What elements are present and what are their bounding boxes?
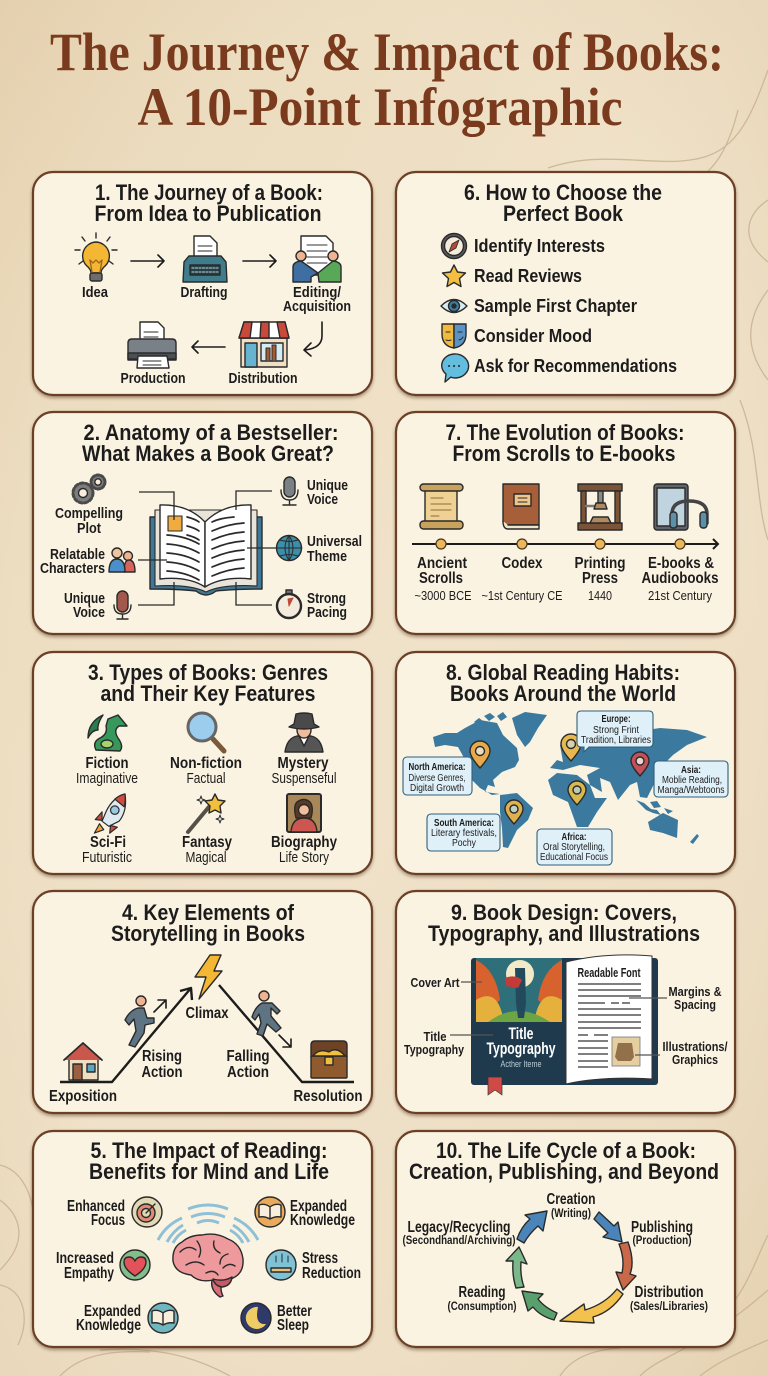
panel 5: impact of reading bbox=[33, 1131, 372, 1347]
panel 4 heading: 4. Key Elements of bbox=[122, 900, 295, 925]
benefit: better sleep bbox=[241, 1303, 312, 1334]
arrow: drafting to editing bbox=[243, 255, 276, 267]
label: title typography: Typography bbox=[404, 1042, 465, 1057]
panel 10: life cycle bbox=[396, 1131, 735, 1347]
label: falling action: Action bbox=[227, 1064, 269, 1081]
panel 7 heading bbox=[446, 420, 684, 466]
benefit: enhanced focus bbox=[67, 1197, 162, 1229]
panel 9 heading: Typography, and Illustrations bbox=[428, 921, 700, 946]
icon: treasure chest bbox=[311, 1041, 347, 1078]
label: printing press bbox=[574, 555, 626, 603]
icon: descending figure bbox=[252, 991, 281, 1036]
label: ancient scrolls: Ancient bbox=[417, 555, 467, 572]
benefit: stress reduction: Stress bbox=[302, 1250, 338, 1267]
callout: north america: North America: bbox=[408, 762, 466, 773]
icon: codex bbox=[503, 484, 539, 529]
label: mystery bbox=[272, 755, 336, 787]
panel 7 heading: From Scrolls to E-books bbox=[452, 441, 676, 466]
label: climax: Climax bbox=[186, 1005, 229, 1022]
panel 8 heading bbox=[446, 660, 680, 706]
label: printing press: Press bbox=[582, 570, 618, 587]
panel 2 heading: 2. Anatomy of a Bestseller: bbox=[84, 420, 338, 445]
callout: europe bbox=[577, 711, 653, 752]
panel 10 heading: 10. The Life Cycle of a Book: bbox=[436, 1138, 696, 1163]
callout: africa: Educational Focus bbox=[540, 852, 608, 863]
labels: unique voice right bbox=[307, 478, 348, 508]
label: legacy and recycling: (Secondhand/Archiving) bbox=[402, 1233, 516, 1247]
map pin: asia bbox=[631, 752, 649, 776]
callout: europe: Europe: bbox=[602, 714, 630, 725]
page text lines bbox=[578, 984, 641, 1067]
icon: theatre masks bbox=[442, 324, 466, 348]
labels: production distribution bbox=[120, 371, 298, 387]
label: resolution: Resolution bbox=[294, 1088, 362, 1105]
label: exposition: Exposition bbox=[49, 1088, 117, 1105]
label: codex: ~1st Century CE bbox=[482, 588, 563, 603]
labels: production distribution: Distribution bbox=[228, 371, 298, 387]
title bbox=[50, 22, 724, 137]
benefit: expanded knowledge bottom bbox=[76, 1303, 178, 1334]
timeline arrow bbox=[412, 539, 718, 549]
callout: south america: Literary festivals, bbox=[431, 828, 497, 839]
label: mystery: Mystery bbox=[278, 755, 329, 772]
label: sci-fi: Sci-Fi bbox=[90, 834, 126, 851]
label: publishing: Publishing bbox=[631, 1219, 693, 1236]
labels: compelling plot bbox=[55, 506, 123, 537]
label: biography bbox=[271, 834, 337, 866]
callout: south america bbox=[427, 814, 500, 851]
icon: biography portrait bbox=[287, 794, 321, 832]
labels: strong pacing: Strong bbox=[307, 591, 346, 607]
label: printing press: Printing bbox=[574, 555, 626, 572]
cover artwork bbox=[476, 958, 562, 1022]
callout: africa: Oral Storytelling, bbox=[543, 842, 605, 853]
benefit: increased empathy: Increased bbox=[56, 1250, 114, 1267]
map pin: africa bbox=[568, 781, 586, 805]
label: falling action bbox=[226, 1048, 270, 1081]
cover title bbox=[486, 1024, 556, 1069]
callout lines bbox=[450, 982, 667, 1055]
benefit: enhanced focus: Focus bbox=[91, 1212, 125, 1229]
labels: idea drafting editing: Idea bbox=[82, 285, 109, 301]
labels: compelling plot: Plot bbox=[77, 521, 101, 537]
panel 9: book design bbox=[396, 891, 735, 1113]
label: creation bbox=[546, 1191, 596, 1220]
label: codex: Codex bbox=[502, 555, 543, 572]
checklist items: Sample First Chapter bbox=[474, 295, 637, 316]
panel 5 heading bbox=[89, 1138, 329, 1184]
icon: typewriter bbox=[183, 236, 227, 282]
label: rising action bbox=[142, 1048, 182, 1081]
labels: strong pacing bbox=[307, 591, 347, 621]
label: codex bbox=[482, 555, 563, 603]
panel 1 heading: 1. The Journey of a Book: bbox=[95, 180, 323, 205]
icon: house bbox=[64, 1043, 102, 1080]
callout: south america: South America: bbox=[434, 818, 494, 829]
callout: europe: Tradition, Libraries bbox=[581, 735, 651, 746]
label: creation: Creation bbox=[546, 1191, 596, 1208]
arrow: idea to drafting bbox=[131, 255, 164, 267]
label: non-fiction: Factual bbox=[186, 771, 226, 787]
panel 6 heading: 6. How to Choose the bbox=[464, 180, 662, 205]
panel 10 heading: Creation, Publishing, and Beyond bbox=[409, 1159, 719, 1184]
panel 8 heading: Books Around the World bbox=[450, 681, 676, 706]
benefit: expanded knowledge bottom: Knowledge bbox=[76, 1317, 141, 1334]
panel 5 heading: 5. The Impact of Reading: bbox=[90, 1138, 328, 1163]
panel 2 heading: What Makes a Book Great? bbox=[82, 441, 334, 466]
labels: unique voice right: Unique bbox=[307, 478, 348, 494]
labels: idea drafting editing bbox=[82, 285, 351, 315]
callout: asia: Manga/Webtoons bbox=[658, 785, 724, 796]
icon: printer bbox=[128, 322, 176, 368]
label: mystery: Suspenseful bbox=[272, 771, 336, 787]
benefit: enhanced focus: Enhanced bbox=[67, 1198, 125, 1215]
cycle arrow: publishing to distribution bbox=[616, 1242, 636, 1290]
label: title typography bbox=[404, 1029, 465, 1057]
arrow: downward bbox=[279, 1035, 291, 1047]
labels: relatable characters: Relatable bbox=[50, 547, 105, 563]
title: A 10-Point Infographic bbox=[138, 77, 622, 137]
checklist items: Identify Interests bbox=[474, 235, 605, 256]
label: ancient scrolls: ~3000 BCE bbox=[414, 588, 472, 603]
label: reading bbox=[448, 1284, 517, 1313]
panel 7 heading: 7. The Evolution of Books: bbox=[446, 420, 684, 445]
label: fantasy: Magical bbox=[186, 850, 226, 866]
benefit: increased empathy: Empathy bbox=[64, 1265, 114, 1282]
icon: printing press bbox=[578, 484, 622, 530]
panel 8: global reading habits bbox=[396, 652, 735, 874]
label: illustrations and graphics: Illustrations/ bbox=[662, 1039, 728, 1054]
icon: people bbox=[109, 548, 135, 572]
panel 4: storytelling bbox=[33, 891, 372, 1113]
labels: idea drafting editing: Drafting bbox=[180, 285, 228, 301]
panel 1: journey of a book bbox=[33, 172, 372, 395]
icon: stopwatch bbox=[277, 590, 301, 618]
panel 3 heading: and Their Key Features bbox=[100, 681, 316, 706]
label: margins and spacing: Margins & bbox=[668, 984, 722, 999]
callout: africa: Africa: bbox=[562, 832, 586, 843]
label: e-books and audiobooks: Audiobooks bbox=[642, 570, 718, 587]
icon: compass bbox=[442, 234, 466, 258]
labels: unique voice left: Voice bbox=[73, 605, 105, 621]
icon: magnifying glass bbox=[188, 713, 224, 751]
label: distribution: (Sales/Libraries) bbox=[630, 1299, 708, 1313]
label: legacy and recycling: Legacy/Recycling bbox=[408, 1219, 510, 1236]
label: rising action: Rising bbox=[142, 1048, 182, 1065]
arrow: upward bbox=[154, 1000, 166, 1012]
icon: open book bbox=[150, 505, 262, 595]
panel 3: genres bbox=[33, 652, 372, 874]
map pin: north america bbox=[470, 741, 490, 768]
page illustration bbox=[612, 1037, 640, 1066]
label: non-fiction: Non-fiction bbox=[170, 755, 242, 772]
icon: lightning bolt bbox=[195, 955, 222, 999]
callout: asia: Asia: bbox=[681, 765, 701, 776]
label: falling action: Falling bbox=[226, 1048, 270, 1065]
checklist items bbox=[474, 235, 677, 376]
icon: speech bubble bbox=[442, 354, 469, 382]
checklist items: Consider Mood bbox=[474, 325, 592, 346]
callout: europe: Strong Frint bbox=[593, 725, 639, 736]
icon: brain bbox=[173, 1234, 243, 1297]
labels: relatable characters: Characters bbox=[40, 561, 105, 577]
label: e-books and audiobooks: 21st Century bbox=[648, 588, 712, 603]
benefit: expanded knowledge top: Knowledge bbox=[290, 1212, 355, 1229]
panel 8 heading: 8. Global Reading Habits: bbox=[446, 660, 680, 685]
icon: scroll bbox=[420, 484, 463, 529]
benefit: stress reduction bbox=[266, 1250, 361, 1282]
label: legacy and recycling bbox=[402, 1219, 516, 1247]
labels: idea drafting editing: Acquisition bbox=[283, 299, 351, 315]
map pin: europe bbox=[561, 734, 581, 761]
panel 10 heading bbox=[409, 1138, 719, 1184]
label: publishing bbox=[631, 1219, 693, 1247]
icon: detective bbox=[285, 713, 323, 752]
label: fantasy bbox=[182, 834, 232, 866]
cycle arrow: distribution to reading bbox=[560, 1289, 623, 1323]
callout: north america bbox=[403, 757, 472, 795]
labels: strong pacing: Pacing bbox=[307, 605, 347, 621]
labels: universal theme: Theme bbox=[307, 549, 347, 565]
callout: africa bbox=[537, 829, 612, 865]
panel 9 heading: 9. Book Design: Covers, bbox=[451, 900, 677, 925]
label: margins and spacing bbox=[668, 984, 722, 1012]
labels: unique voice right: Voice bbox=[307, 492, 338, 508]
panel 3 heading: 3. Types of Books: Genres bbox=[88, 660, 328, 685]
icon: tablet and headphones bbox=[654, 484, 707, 530]
panel 5 heading: Benefits for Mind and Life bbox=[89, 1159, 329, 1184]
callout: north america: Diverse Genres, bbox=[408, 773, 466, 784]
icon: globe bbox=[276, 536, 302, 560]
bookmark bbox=[488, 1077, 502, 1095]
label: illustrations and graphics: Graphics bbox=[672, 1052, 718, 1067]
leader lines bbox=[138, 491, 276, 605]
label: distribution: Distribution bbox=[634, 1284, 704, 1301]
panel 1 heading bbox=[94, 180, 323, 226]
world map bbox=[433, 712, 707, 848]
timeline markers bbox=[436, 539, 685, 549]
label: creation: (Writing) bbox=[551, 1206, 591, 1220]
benefit: better sleep: Better bbox=[277, 1303, 312, 1320]
benefit: increased empathy bbox=[56, 1250, 150, 1282]
checklist items: Read Reviews bbox=[474, 265, 582, 286]
panel 7: evolution of books bbox=[396, 412, 735, 634]
icon: light bulb bbox=[75, 233, 117, 281]
label: distribution bbox=[630, 1284, 708, 1313]
benefit: better sleep: Sleep bbox=[277, 1317, 309, 1334]
icon: rocket bbox=[94, 794, 126, 833]
label: ancient scrolls bbox=[414, 555, 472, 603]
story arc bbox=[60, 985, 354, 1082]
panel 9 heading bbox=[428, 900, 700, 946]
arrow: editing to distribution bbox=[304, 322, 322, 356]
label: biography: Biography bbox=[271, 834, 337, 851]
label: sci-fi: Futuristic bbox=[82, 850, 132, 866]
labels: unique voice left: Unique bbox=[64, 591, 105, 607]
benefit: stress reduction: Reduction bbox=[302, 1265, 361, 1282]
label: e-books and audiobooks bbox=[642, 555, 718, 603]
label: reading: Reading bbox=[458, 1284, 506, 1301]
checklist items: Ask for Recommendations bbox=[474, 355, 677, 376]
label: fiction: Imaginative bbox=[76, 771, 138, 787]
arrow: distribution to production bbox=[192, 341, 225, 353]
cycle arrow: creation to publishing bbox=[594, 1212, 622, 1242]
label: illustrations and graphics bbox=[662, 1039, 728, 1067]
labels: compelling plot: Compelling bbox=[55, 506, 123, 522]
label: fiction bbox=[76, 755, 138, 787]
labels: unique voice left bbox=[64, 591, 105, 621]
panel 6 heading: Perfect Book bbox=[503, 201, 624, 226]
icon: dragon bbox=[88, 715, 127, 751]
icon: magic wand bbox=[188, 794, 225, 832]
label: margins and spacing: Spacing bbox=[674, 997, 716, 1012]
label: readable font: Readable Font bbox=[578, 965, 641, 980]
panel 4 heading bbox=[111, 900, 305, 946]
label: printing press: 1440 bbox=[588, 588, 612, 603]
panel 4 heading: Storytelling in Books bbox=[111, 921, 305, 946]
icon: grey microphone bbox=[281, 477, 298, 505]
label: biography: Life Story bbox=[279, 850, 330, 866]
label: title typography: Title bbox=[424, 1029, 446, 1044]
icon: red microphone bbox=[114, 591, 131, 619]
panel 6: choosing a book bbox=[396, 172, 735, 395]
labels: universal theme bbox=[307, 534, 362, 565]
panel 2 heading bbox=[82, 420, 338, 466]
label: rising action: Action bbox=[142, 1064, 182, 1081]
cover title: Title bbox=[508, 1024, 534, 1043]
map pin: south america bbox=[505, 800, 523, 824]
benefit: expanded knowledge top bbox=[255, 1197, 355, 1229]
cycle arrow: up to creation bbox=[517, 1211, 547, 1243]
cover title: Typography bbox=[486, 1039, 556, 1058]
labels: relatable characters bbox=[40, 547, 105, 577]
benefit: expanded knowledge top: Expanded bbox=[290, 1198, 347, 1215]
label: non-fiction bbox=[170, 755, 242, 787]
labels: production distribution: Production bbox=[120, 371, 186, 387]
cycle arrow: reading to legacy bbox=[522, 1291, 557, 1320]
icon: bookstore bbox=[239, 322, 289, 367]
icon: editors shaking hands bbox=[293, 236, 341, 282]
icon: climbing figure bbox=[125, 996, 154, 1047]
illustrated book bbox=[471, 955, 658, 1095]
callout: asia: Moblie Reading, bbox=[662, 775, 722, 786]
panel 3 heading bbox=[88, 660, 328, 706]
labels: idea drafting editing: Editing/ bbox=[293, 285, 341, 301]
icon: eye bbox=[441, 300, 467, 312]
label: ancient scrolls: Scrolls bbox=[419, 570, 463, 587]
label: cover art: Cover Art bbox=[410, 975, 460, 990]
icon: star bbox=[442, 265, 466, 286]
icon: gears bbox=[73, 475, 105, 503]
label: sci-fi bbox=[82, 834, 132, 866]
callout: south america: Pochy bbox=[452, 838, 476, 849]
callout: north america: Digital Growth bbox=[410, 783, 464, 794]
benefit: expanded knowledge bottom: Expanded bbox=[84, 1303, 141, 1320]
label: e-books and audiobooks: E-books & bbox=[648, 555, 714, 572]
label: publishing: (Production) bbox=[632, 1233, 692, 1247]
panel 1 heading: From Idea to Publication bbox=[94, 201, 322, 226]
label: fiction: Fiction bbox=[86, 755, 128, 772]
cover title: Acther Iteme bbox=[500, 1059, 542, 1069]
labels: universal theme: Universal bbox=[307, 534, 362, 550]
cycle arrow: legacy to reader bbox=[506, 1247, 527, 1288]
panel 6 heading bbox=[464, 180, 662, 226]
signal waves bbox=[158, 1205, 258, 1243]
panel 2: anatomy of a bestseller bbox=[33, 412, 372, 634]
label: reading: (Consumption) bbox=[448, 1299, 517, 1313]
callout: asia bbox=[654, 761, 728, 797]
label: fantasy: Fantasy bbox=[182, 834, 232, 851]
